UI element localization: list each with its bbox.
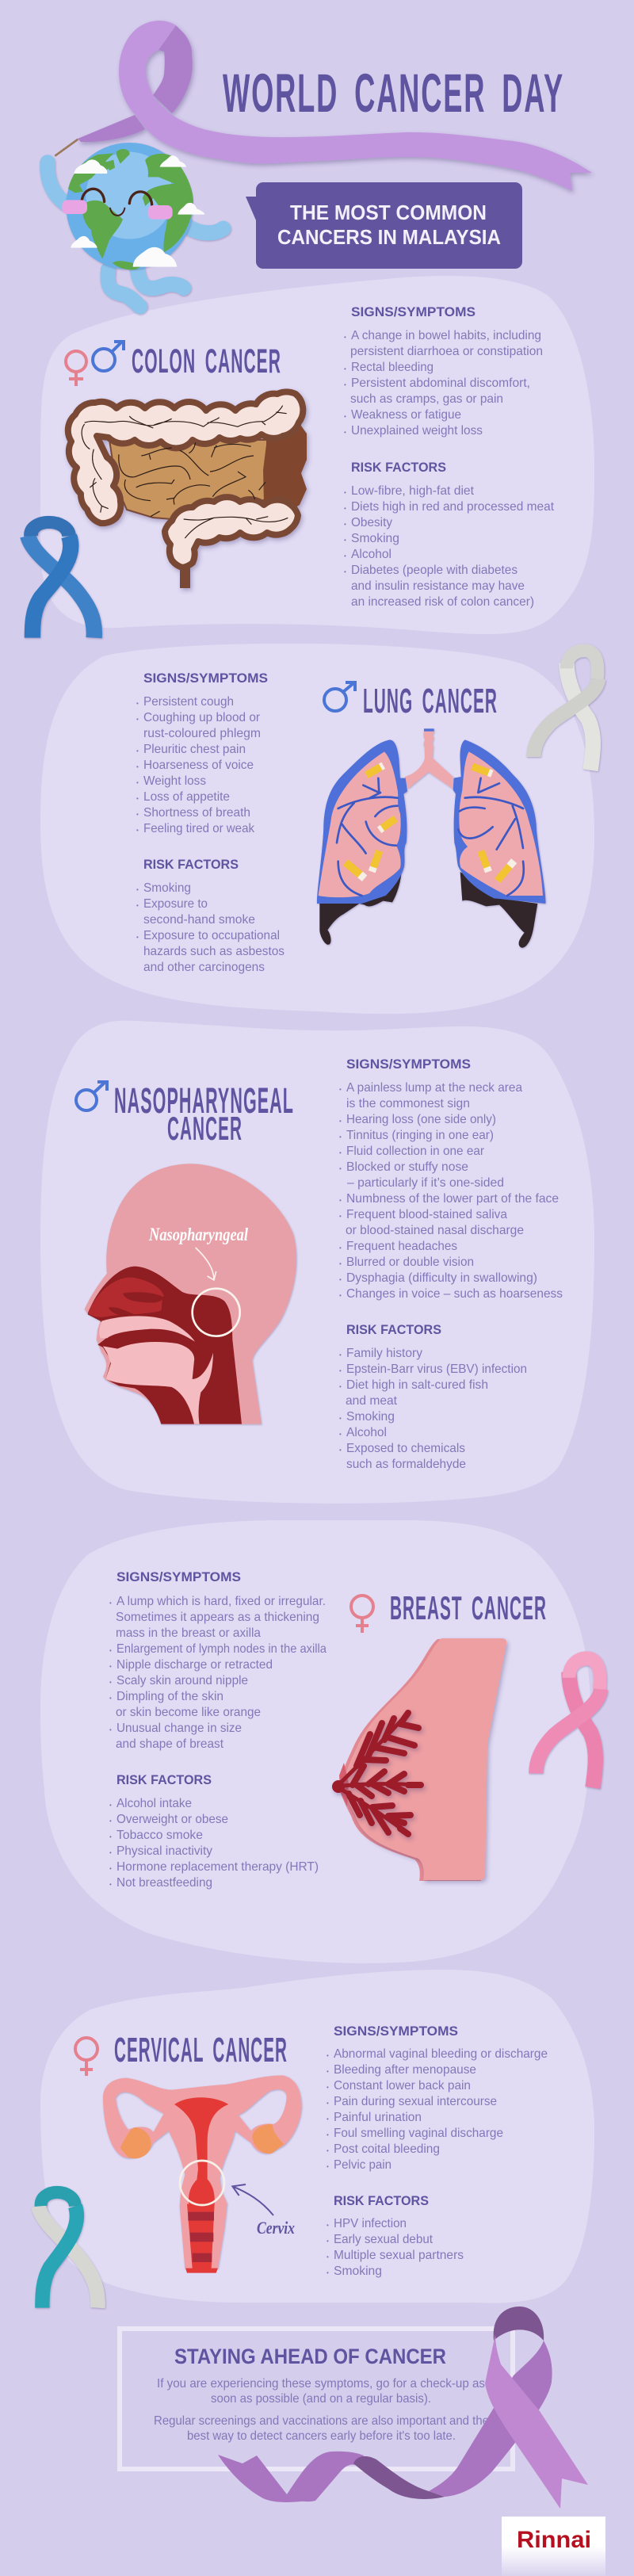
header: purple ribbon bbox=[78, 21, 592, 191]
icon: female symbol bbox=[66, 351, 86, 386]
text: cervical signs and risks: Foul smelling vaginal discharge bbox=[334, 2127, 503, 2140]
text: lung signs and risks: • bbox=[136, 700, 139, 707]
text: nasopharyngeal signs and risks: – particularly if it’s one-sided bbox=[347, 1176, 504, 1190]
text: colon signs and risks: • bbox=[344, 429, 346, 436]
text: nasopharyngeal signs and risks: Hearing loss (one side only) bbox=[346, 1113, 496, 1126]
uterine cavity bbox=[174, 2097, 228, 2204]
text: lung signs and risks: • bbox=[136, 779, 139, 786]
text: colon signs and risks bbox=[344, 304, 555, 609]
text: colon signs and risks: Low-fibre, high-fat diet bbox=[351, 484, 475, 498]
text: nasopharyngeal signs and risks: Frequent headaches bbox=[346, 1240, 457, 1253]
infographic canvas: NASOPHARYNGEAL bbox=[114, 1080, 294, 1121]
panel: cervical cancer bbox=[40, 1970, 594, 2303]
text: cervical signs and risks: Post coital bleeding bbox=[334, 2142, 440, 2156]
text: nasopharyngeal signs and risks: • bbox=[339, 1165, 342, 1172]
text: colon signs and risks: • bbox=[344, 505, 346, 512]
text: nasopharyngeal signs and risks: • bbox=[339, 1431, 342, 1438]
text: colon signs and risks: Alcohol bbox=[351, 548, 391, 561]
text: nasopharyngeal signs and risks: • bbox=[339, 1244, 342, 1252]
text: cervical signs and risks: Multiple sexual partners bbox=[334, 2249, 464, 2262]
text: lung signs and risks: Coughing up blood or bbox=[143, 711, 261, 724]
text: cervical signs and risks: • bbox=[327, 2238, 329, 2245]
text: nasopharyngeal signs and risks: Epstein-Barr virus (EBV) infection bbox=[346, 1363, 527, 1376]
text: lung signs and risks bbox=[136, 671, 285, 974]
lung heading bbox=[324, 682, 498, 720]
text: colon signs and risks: SIGNS/SYMPTOMS bbox=[351, 304, 476, 319]
text: nasopharyngeal signs and risks: • bbox=[339, 1118, 342, 1125]
arrow bbox=[196, 1248, 216, 1280]
subtitle speech box: THE MOST COMMON bbox=[290, 201, 487, 224]
subtitle speech box bbox=[246, 182, 522, 269]
text: nasopharyngeal signs and risks: • bbox=[339, 1260, 342, 1267]
text: nasopharyngeal signs and risks: • bbox=[339, 1149, 342, 1156]
text: nasopharyngeal signs and risks: • bbox=[339, 1383, 342, 1390]
text: lung signs and risks: • bbox=[136, 716, 139, 723]
lung lobes bbox=[317, 740, 407, 904]
text: lung signs and risks: and other carcinogens bbox=[143, 961, 265, 974]
nose lining bbox=[88, 1278, 164, 1317]
smoke drips bbox=[319, 872, 402, 945]
text: cervical signs and risks: Abnormal vaginal bleeding or discharge bbox=[334, 2047, 548, 2061]
text: nasopharyngeal signs and risks: Numbness of the lower part of the face bbox=[346, 1192, 559, 1206]
uterus and fallopian tubes bbox=[103, 2075, 302, 2268]
subtitle speech box: CANCERS IN MALAYSIA bbox=[277, 225, 501, 249]
text: breast signs and risks: Not breastfeeding bbox=[116, 1876, 212, 1890]
text: breast signs and risks: • bbox=[109, 1726, 112, 1733]
text: lung signs and risks: • bbox=[136, 763, 139, 770]
text: lung signs and risks: Smoking bbox=[143, 881, 191, 895]
text: cervical signs and risks: • bbox=[327, 2147, 329, 2154]
text: breast signs and risks: • bbox=[109, 1817, 112, 1825]
illustration: head cross-section bbox=[85, 1164, 296, 1424]
callout: staying ahead of cancer: STAYING AHEAD OF CANCER bbox=[174, 2345, 446, 2368]
text: lung signs and risks: Pleuritic chest pain bbox=[143, 743, 246, 756]
cheeks bbox=[62, 200, 87, 214]
text: colon signs and risks: A change in bowel habits, including bbox=[351, 329, 541, 342]
text: nasopharyngeal signs and risks: such as formaldehyde bbox=[346, 1458, 466, 1471]
text: cervical signs and risks: • bbox=[327, 2131, 329, 2138]
text: colon signs and risks: • bbox=[344, 365, 346, 373]
text: breast signs and risks: • bbox=[109, 1647, 112, 1654]
trachea bbox=[405, 730, 454, 789]
illustration: uterus bbox=[103, 2075, 302, 2273]
text: nasopharyngeal signs and risks: • bbox=[339, 1197, 342, 1204]
text: breast signs and risks: Scaly skin around nipple bbox=[116, 1674, 248, 1687]
text: cervical signs and risks: Early sexual debut bbox=[334, 2233, 433, 2246]
text: colon signs and risks: RISK FACTORS bbox=[351, 460, 446, 475]
text: breast signs and risks: • bbox=[109, 1802, 112, 1809]
text: lung signs and risks: • bbox=[136, 902, 139, 909]
closing purple ribbon bbox=[218, 2307, 588, 2509]
text: nasopharyngeal signs and risks: Exposed to chemicals bbox=[346, 1442, 465, 1455]
icon: pink awareness ribbon bbox=[536, 1658, 601, 1787]
callout: staying ahead of cancer: best way to detect cancers early before it's too late. bbox=[187, 2429, 456, 2443]
panel: lung cancer bbox=[40, 644, 594, 1014]
text: nasopharyngeal signs and risks: is the commonest sign bbox=[346, 1097, 470, 1110]
text: nasopharyngeal signs and risks: Changes in voice – such as hoarseness bbox=[346, 1287, 563, 1301]
breast heading bbox=[351, 1589, 547, 1633]
text: colon signs and risks: • bbox=[344, 413, 346, 420]
text: breast signs and risks: mass in the breast or axilla bbox=[116, 1626, 261, 1640]
text: nasopharyngeal signs and risks: • bbox=[339, 1447, 342, 1454]
text: cervical signs and risks: • bbox=[327, 2269, 329, 2276]
text: breast signs and risks: • bbox=[109, 1865, 112, 1872]
text: lung signs and risks: Persistent cough bbox=[143, 695, 234, 709]
text: cervical signs and risks: • bbox=[327, 2253, 329, 2261]
text: breast signs and risks: RISK FACTORS bbox=[116, 1772, 212, 1787]
text: breast signs and risks: • bbox=[109, 1663, 112, 1670]
icon: male symbol bbox=[76, 1082, 107, 1110]
text: lung signs and risks: Loss of appetite bbox=[143, 790, 230, 804]
text: lung signs and risks: Hoarseness of voice bbox=[143, 759, 254, 772]
text: colon signs and risks: persistent diarrhoea or constipation bbox=[350, 345, 543, 358]
illustration: breast bbox=[332, 1638, 506, 1881]
ovaries bbox=[120, 2127, 151, 2158]
arrow to cervix bbox=[232, 2184, 273, 2215]
text: breast signs and risks: • bbox=[109, 1599, 112, 1607]
text: lung signs and risks: • bbox=[136, 795, 139, 802]
text: colon signs and risks: • bbox=[344, 552, 346, 560]
text: lung signs and risks: • bbox=[136, 811, 139, 818]
panel: breast cancer bbox=[40, 1520, 590, 1963]
text: cervical signs and risks: • bbox=[327, 2100, 329, 2107]
text: breast signs and risks: and shape of breast bbox=[116, 1737, 224, 1751]
text: lung signs and risks: • bbox=[136, 934, 139, 941]
text: colon signs and risks: an increased risk of colon cancer) bbox=[351, 595, 534, 609]
text: colon signs and risks: • bbox=[344, 334, 346, 341]
text: nasopharyngeal signs and risks: Smoking bbox=[346, 1410, 395, 1424]
text: colon signs and risks: Unexplained weight loss bbox=[351, 424, 483, 438]
text: colon signs and risks: and insulin resistance may have bbox=[351, 579, 525, 593]
cigarettes bbox=[343, 762, 517, 883]
text: cervical signs and risks: • bbox=[327, 2084, 329, 2091]
text: breast signs and risks: Hormone replacement therapy (HRT) bbox=[116, 1860, 319, 1874]
text: colon signs and risks: Obesity bbox=[351, 516, 392, 529]
text: nasopharyngeal signs and risks: Alcohol bbox=[346, 1426, 387, 1439]
text: breast signs and risks: • bbox=[109, 1833, 112, 1840]
callout: staying ahead of cancer: Regular screenings and vaccinations are also important and the bbox=[154, 2414, 489, 2428]
text: cervical signs and risks: Smoking bbox=[334, 2265, 382, 2278]
text: cervical signs and risks: • bbox=[327, 2052, 329, 2059]
icon: male symbol bbox=[324, 682, 355, 711]
logo: Rinnai: Rinnai bbox=[517, 2527, 591, 2553]
illustration: smiling globe bbox=[48, 140, 223, 307]
text: nasopharyngeal signs and risks: SIGNS/SYMPTOMS bbox=[346, 1057, 471, 1072]
text: breast signs and risks: Unusual change in size bbox=[116, 1722, 242, 1735]
nasopharyngeal heading bbox=[76, 1080, 294, 1147]
text: lung signs and risks: RISK FACTORS bbox=[143, 857, 239, 872]
callout: staying ahead of cancer: soon as possible (and on a regular basis). bbox=[211, 2392, 431, 2406]
text: breast signs and risks: Nipple discharge or retracted bbox=[116, 1658, 273, 1672]
text: breast signs and risks: Enlargement of lymph nodes in the axilla bbox=[116, 1642, 327, 1656]
icon: blue awareness ribbon bbox=[28, 522, 94, 638]
text: lung signs and risks: Feeling tired or weak bbox=[143, 822, 255, 835]
text: nasopharyngeal signs and risks: Blurred or double vision bbox=[346, 1256, 474, 1269]
infographic canvas: COLON CANCER bbox=[132, 342, 281, 380]
text: lung signs and risks: Weight loss bbox=[143, 774, 206, 788]
text: breast signs and risks: Overweight or obese bbox=[116, 1813, 228, 1826]
logo: Rinnai bbox=[502, 2517, 605, 2576]
throat and nasal cavity bbox=[88, 1267, 242, 1424]
text: lung signs and risks: • bbox=[136, 827, 139, 834]
text: lung signs and risks: • bbox=[136, 886, 139, 893]
text: nasopharyngeal signs and risks: Tinnitus (ringing in one ear) bbox=[346, 1129, 494, 1142]
label: Nasopharyngeal: Nasopharyngeal bbox=[148, 1225, 248, 1244]
nasopharyngeal heading: CANCER bbox=[167, 1110, 243, 1147]
text: cervical signs and risks: Bleeding after menopause bbox=[334, 2063, 476, 2077]
text: nasopharyngeal signs and risks: • bbox=[339, 1292, 342, 1299]
clouds bbox=[71, 155, 204, 267]
cervical heading bbox=[75, 2031, 288, 2076]
text: nasopharyngeal signs and risks: Frequent blood-stained saliva bbox=[346, 1208, 507, 1221]
callout: staying ahead of cancer bbox=[120, 2329, 513, 2469]
text: colon signs and risks: Rectal bleeding bbox=[351, 361, 433, 374]
colon heading bbox=[66, 342, 281, 386]
panel: colon cancer bbox=[40, 276, 594, 634]
panel: nasopharyngeal cancer bbox=[40, 1021, 594, 1504]
milk ducts bbox=[332, 1713, 421, 1834]
text: breast signs and risks bbox=[109, 1569, 327, 1890]
text: cervical signs and risks: Painful urination bbox=[334, 2111, 422, 2124]
text: colon signs and risks: • bbox=[344, 521, 346, 528]
text: breast signs and risks: Alcohol intake bbox=[116, 1797, 192, 1810]
text: colon signs and risks: Diets high in red and processed meat bbox=[351, 500, 555, 514]
text: cervical signs and risks: • bbox=[327, 2068, 329, 2075]
icon: female symbol bbox=[351, 1596, 373, 1633]
text: nasopharyngeal signs and risks: Fluid collection in one ear bbox=[346, 1145, 485, 1158]
text: colon signs and risks: • bbox=[344, 489, 346, 496]
label: Cervix: Cervix bbox=[257, 2218, 295, 2238]
text: nasopharyngeal signs and risks: Diet high in salt-cured fish bbox=[346, 1378, 488, 1392]
callout: staying ahead of cancer: If you are experiencing these symptoms, go for a check-up as bbox=[157, 2377, 485, 2391]
text: breast signs and risks: Tobacco smoke bbox=[116, 1829, 203, 1842]
infographic canvas: CERVICAL CANCER bbox=[114, 2031, 288, 2070]
face bbox=[82, 189, 152, 216]
text: breast signs and risks: • bbox=[109, 1881, 112, 1888]
globe arms and legs bbox=[48, 162, 223, 307]
text: cervical signs and risks: SIGNS/SYMPTOMS bbox=[334, 2024, 458, 2039]
text: nasopharyngeal signs and risks: RISK FACTORS bbox=[346, 1322, 441, 1337]
text: nasopharyngeal signs and risks: • bbox=[339, 1367, 342, 1374]
text: breast signs and risks: Physical inactivity bbox=[116, 1844, 212, 1858]
text: cervical signs and risks: Pelvic pain bbox=[334, 2158, 391, 2172]
text: nasopharyngeal signs and risks: • bbox=[339, 1213, 342, 1220]
text: nasopharyngeal signs and risks: • bbox=[339, 1351, 342, 1359]
text: colon signs and risks: such as cramps, gas or pain bbox=[350, 392, 503, 406]
text: colon signs and risks: Diabetes (people with diabetes bbox=[351, 564, 518, 577]
illustration: lungs bbox=[317, 728, 545, 948]
text: nasopharyngeal signs and risks: • bbox=[339, 1415, 342, 1422]
text: lung signs and risks: • bbox=[136, 747, 139, 755]
text: breast signs and risks: or skin become like orange bbox=[116, 1706, 261, 1719]
bronchi bbox=[337, 778, 524, 896]
text: nasopharyngeal signs and risks bbox=[339, 1057, 563, 1471]
text: cervical signs and risks bbox=[327, 2024, 548, 2278]
text: breast signs and risks: • bbox=[109, 1679, 112, 1686]
earth bbox=[66, 143, 193, 269]
text: cervical signs and risks: HPV infection bbox=[334, 2217, 407, 2230]
vaginal stripes bbox=[188, 2212, 214, 2262]
icon: teal and silver awareness ribbon bbox=[38, 2192, 98, 2308]
white highlight circle bbox=[193, 1289, 240, 1336]
text: colon signs and risks: • bbox=[344, 568, 346, 575]
text: breast signs and risks: Dimpling of the skin bbox=[116, 1690, 223, 1703]
icon: male symbol bbox=[93, 342, 124, 371]
text: colon signs and risks: Weakness or fatigue bbox=[351, 408, 461, 422]
flag stick bbox=[55, 140, 78, 156]
text: lung signs and risks: Exposure to bbox=[143, 897, 208, 911]
text: cervical signs and risks: Pain during sexual intercourse bbox=[334, 2095, 497, 2108]
text: nasopharyngeal signs and risks: or blood-stained nasal discharge bbox=[346, 1224, 524, 1237]
text: colon signs and risks: • bbox=[344, 537, 346, 544]
text: colon signs and risks: • bbox=[344, 381, 346, 388]
illustration: colon bbox=[68, 392, 307, 588]
text: nasopharyngeal signs and risks: A painless lump at the neck area bbox=[346, 1081, 522, 1095]
highlight circle bbox=[180, 2161, 224, 2205]
text: lung signs and risks: hazards such as asbestos bbox=[143, 945, 285, 958]
text: breast signs and risks: A lump which is hard, fixed or irregular. bbox=[116, 1595, 326, 1608]
text: nasopharyngeal signs and risks: Dysphagia (difficulty in swallowing) bbox=[346, 1271, 537, 1285]
text: lung signs and risks: second-hand smoke bbox=[143, 913, 255, 927]
text: lung signs and risks: rust-coloured phlegm bbox=[143, 727, 261, 740]
text: breast signs and risks: • bbox=[109, 1695, 112, 1702]
text: nasopharyngeal signs and risks: Blocked or stuffy nose bbox=[346, 1160, 468, 1174]
text: nasopharyngeal signs and risks: • bbox=[339, 1086, 342, 1093]
text: breast signs and risks: Sometimes it appears as a thickening bbox=[116, 1611, 319, 1624]
text: lung signs and risks: Shortness of breath bbox=[143, 806, 250, 820]
text: lung signs and risks: Exposure to occupational bbox=[143, 929, 280, 942]
text: nasopharyngeal signs and risks: • bbox=[339, 1276, 342, 1283]
text: nasopharyngeal signs and risks: and meat bbox=[346, 1394, 398, 1408]
colon wrinkles bbox=[82, 406, 288, 538]
text: nasopharyngeal signs and risks: • bbox=[339, 1133, 342, 1141]
text: colon signs and risks: Persistent abdominal discomfort, bbox=[351, 376, 530, 390]
text: breast signs and risks: SIGNS/SYMPTOMS bbox=[116, 1569, 241, 1584]
palate bbox=[99, 1316, 195, 1342]
text: cervical signs and risks: RISK FACTORS bbox=[334, 2193, 429, 2208]
text: colon signs and risks: Smoking bbox=[351, 532, 399, 545]
text: nasopharyngeal signs and risks: Family history bbox=[346, 1347, 422, 1360]
text: lung signs and risks: SIGNS/SYMPTOMS bbox=[143, 671, 268, 686]
icon: silver awareness ribbon bbox=[533, 651, 598, 770]
nipple bbox=[339, 1763, 349, 1806]
text: breast signs and risks: • bbox=[109, 1849, 112, 1856]
jaw and windpipe bbox=[103, 1342, 213, 1424]
text: cervical signs and risks: Constant lower back pain bbox=[334, 2079, 471, 2093]
text: cervical signs and risks: • bbox=[327, 2222, 329, 2229]
icon: female symbol bbox=[75, 2038, 97, 2076]
text: cervical signs and risks: • bbox=[327, 2115, 329, 2123]
text: cervical signs and risks: • bbox=[327, 2163, 329, 2170]
